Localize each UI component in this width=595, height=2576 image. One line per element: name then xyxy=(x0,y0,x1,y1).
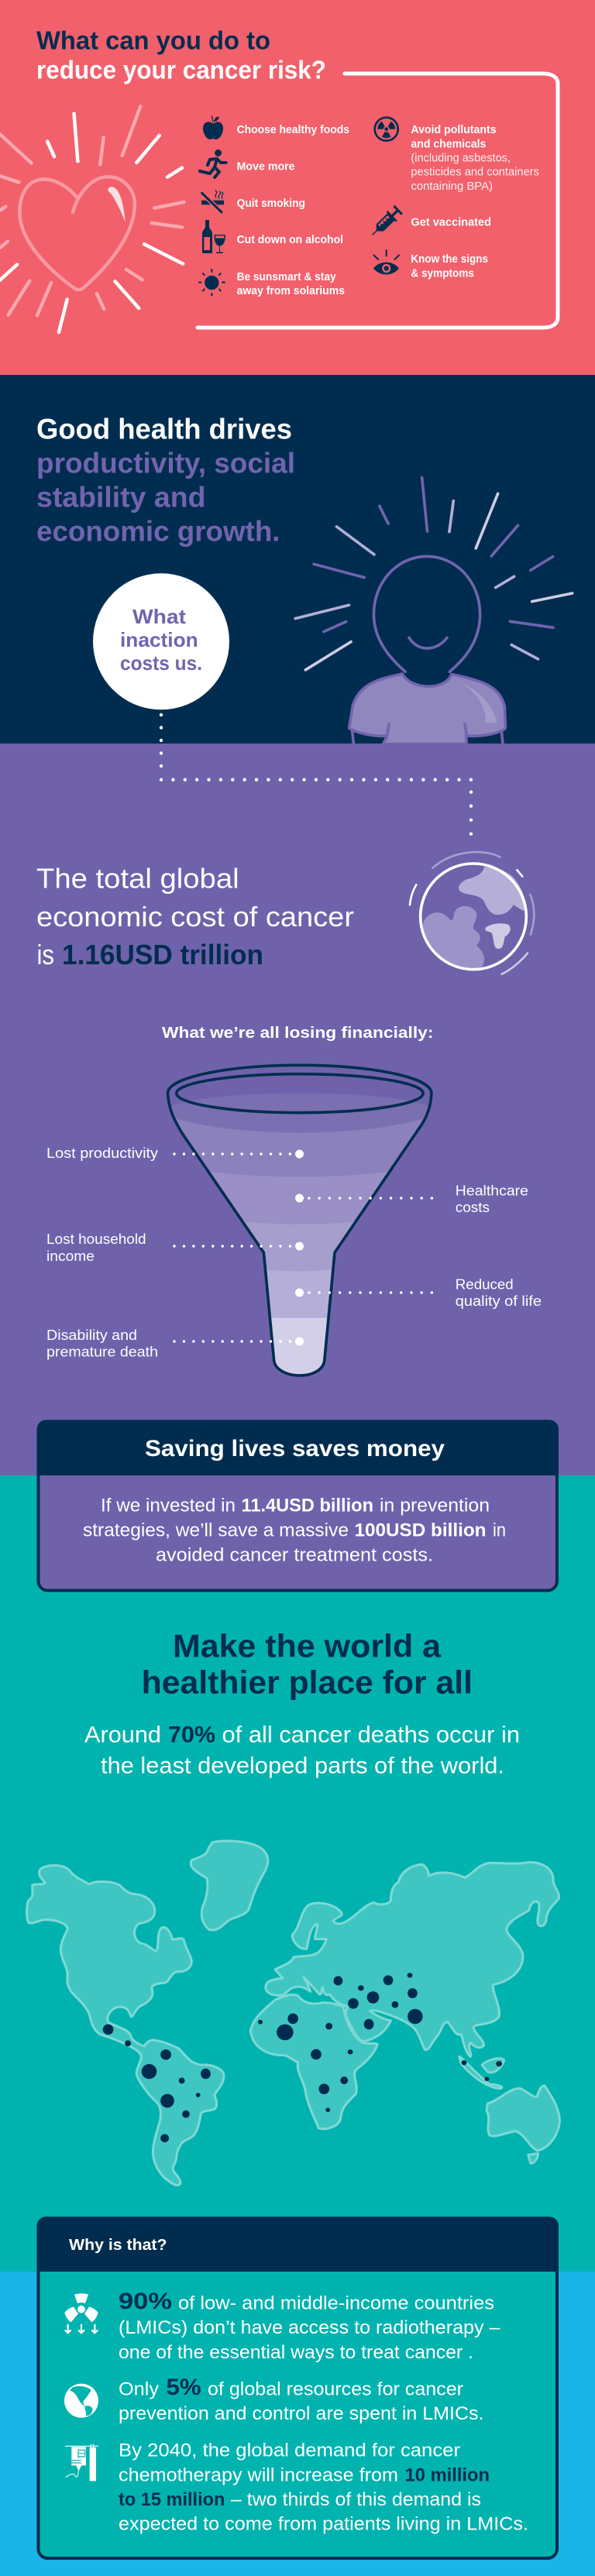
tip: avoid pollutants: and chemicals xyxy=(411,138,486,151)
callout: why is that: Why is that? xyxy=(69,2237,167,2254)
stat: 90 percent: one of the essential ways to treat cancer . xyxy=(119,2342,473,2363)
map: greenland xyxy=(191,1841,268,1930)
label: healthcare costs: costs xyxy=(456,1200,490,1215)
heading: good health drives: productivity, social xyxy=(36,448,295,479)
stat: 5 percent: Only xyxy=(119,2379,159,2399)
heading: good health drives: stability and xyxy=(36,482,206,513)
icon: apple xyxy=(203,116,223,139)
tip: healthy foods: Choose healthy foods xyxy=(237,123,349,136)
text: 70 percent of deaths: Around xyxy=(84,1722,161,1747)
label: healthcare costs: Healthcare xyxy=(456,1183,528,1198)
text: investment savings: 11.4USD billion xyxy=(242,1496,373,1516)
stat: 5 percent: prevention and control are spent in LMICs. xyxy=(119,2403,483,2424)
callout: why is that xyxy=(37,2217,559,2558)
stat: 5 percent: 5% xyxy=(166,2375,201,2400)
label: lost household income: Lost household xyxy=(46,1231,146,1247)
icon: sun xyxy=(199,270,225,296)
heading: total global economic cost: 1.16USD trillion xyxy=(62,939,263,970)
tip: get vaccinated xyxy=(368,204,491,239)
label: disability and premature death: Disability and xyxy=(46,1327,137,1343)
stat: 5 percent: of global resources for cancer xyxy=(208,2379,463,2399)
heading: good health drives: Good health drives xyxy=(36,414,292,445)
tip: avoid pollutants: pesticides and containers xyxy=(411,166,539,179)
label: lost household income xyxy=(46,1231,304,1264)
map: indonesia xyxy=(459,2056,502,2088)
panel: blue footer background xyxy=(0,2272,595,2576)
frame around tips xyxy=(198,74,558,328)
text: 70 percent of deaths: of all cancer deaths occur in xyxy=(222,1722,520,1747)
callout: what inaction costs us: costs us. xyxy=(120,651,202,675)
tip: get vaccinated: Get vaccinated xyxy=(411,216,491,229)
heading: what can you do: What can you do to xyxy=(36,26,270,54)
callout: what inaction costs us: What xyxy=(132,605,186,628)
tip: avoid pollutants: Avoid pollutants xyxy=(411,123,497,136)
text: investment savings: strategies, we’ll save a massive xyxy=(83,1520,349,1540)
panel: good health xyxy=(0,375,595,744)
stat: 90 percent: 90% xyxy=(119,2289,172,2314)
stat: 90 percent: of low- and middle-income countries xyxy=(178,2293,494,2314)
tip: avoid pollutants: (including asbestos, xyxy=(411,151,511,164)
icon: globe xyxy=(410,852,534,974)
callout: saving lives saves money xyxy=(37,1420,559,1591)
tip: quit smoking xyxy=(201,191,305,212)
map: tasmania xyxy=(528,2153,538,2163)
heading: total global economic cost: is xyxy=(37,939,54,970)
text: investment savings: in xyxy=(493,1520,506,1540)
tip: quit smoking: Quit smoking xyxy=(237,197,305,210)
stat: chemotherapy demand xyxy=(65,2440,528,2535)
heading: what can you do: reduce your cancer risk? xyxy=(36,56,326,84)
heading: total global economic cost xyxy=(36,863,354,970)
text: 70 percent of deaths xyxy=(84,1722,520,1778)
tip: sunsmart: Be sunsmart & stay xyxy=(237,270,336,283)
icon: earth xyxy=(64,2384,98,2418)
tip: know the signs xyxy=(373,250,488,280)
stat: chemotherapy demand: chemotherapy will increase from xyxy=(119,2464,398,2485)
heading: make the world: Make the world a xyxy=(173,1627,442,1664)
text: investment savings: If we invested in xyxy=(101,1496,236,1516)
icon: radiotherapy xyxy=(64,2293,98,2333)
icon: chemotherapy xyxy=(65,2444,98,2481)
text: investment savings: 100USD billion xyxy=(355,1520,487,1540)
panel: reduce your cancer risk xyxy=(0,0,595,375)
stat: 5 percent xyxy=(64,2375,483,2424)
stat: chemotherapy demand: 10 million xyxy=(405,2464,490,2485)
icon: bottle and glass xyxy=(202,220,225,253)
text: investment savings: in prevention xyxy=(380,1496,490,1516)
subheading: losing financially: What we’re all losing financially: xyxy=(162,1025,433,1042)
callout: saving lives saves money: Saving lives saves money xyxy=(145,1436,445,1461)
tip: alcohol xyxy=(202,220,343,253)
stat: chemotherapy demand: – two thirds of this demand is xyxy=(231,2489,481,2510)
callout: what inaction costs us: inaction xyxy=(120,628,198,651)
connector: dotted line xyxy=(161,715,471,834)
icon: syringe xyxy=(368,204,404,239)
map: eurasia xyxy=(266,1863,559,2056)
chart: funnel xyxy=(167,1065,432,1379)
stat: 90 percent: (LMICs) don’t have access to radiotherapy – xyxy=(119,2317,500,2338)
heading: total global economic cost: economic cost of cancer xyxy=(36,901,354,933)
icon: heart with rays xyxy=(0,106,184,332)
tip: know the signs: Know the signs xyxy=(411,252,488,266)
stat: chemotherapy demand: to 15 million xyxy=(119,2489,225,2510)
panel: healthier world xyxy=(0,1475,595,2272)
map: americas xyxy=(27,1865,224,2186)
tip: avoid pollutants xyxy=(375,118,539,193)
label: reduced quality of life xyxy=(295,1276,542,1309)
tip: healthy foods xyxy=(203,116,349,139)
heading: what can you do xyxy=(36,26,326,84)
stat: 90 percent xyxy=(64,2289,500,2363)
label: disability and premature death: premature death xyxy=(46,1345,158,1360)
map: australia xyxy=(487,2086,559,2151)
heading: good health drives: economic growth. xyxy=(36,515,280,547)
map: africa xyxy=(250,1994,377,2129)
label: lost productivity xyxy=(46,1145,304,1161)
map: borneo xyxy=(482,2059,504,2073)
label: lost productivity: Lost productivity xyxy=(46,1145,158,1161)
label: lost household income: income xyxy=(46,1249,95,1264)
tip: move more xyxy=(200,149,295,177)
heading: make the world: healthier place for all xyxy=(142,1664,473,1701)
chart: world map xyxy=(27,1841,559,2186)
label: reduced quality of life: Reduced xyxy=(456,1276,514,1292)
text: 70 percent of deaths: 70% xyxy=(168,1722,215,1747)
text: investment savings: avoided cancer treatment costs. xyxy=(156,1545,433,1566)
stat: chemotherapy demand: By 2040, the global demand for cancer xyxy=(119,2440,460,2461)
label: healthcare costs xyxy=(295,1183,528,1215)
tip: alcohol: Cut down on alcohol xyxy=(237,233,343,246)
heading: make the world xyxy=(142,1627,473,1701)
tip: move more: Move more xyxy=(237,160,295,173)
heading: total global economic cost: The total global xyxy=(36,863,239,895)
icon: eye xyxy=(373,250,399,274)
label: disability and premature death xyxy=(46,1327,304,1360)
icon: no smoking xyxy=(201,191,224,212)
text: 70 percent of deaths: the least developed parts of the world. xyxy=(101,1753,504,1778)
label: reduced quality of life: quality of life xyxy=(456,1293,542,1309)
icon: radiation xyxy=(375,118,398,141)
tip: avoid pollutants: containing BPA) xyxy=(411,180,493,193)
panel: economic cost xyxy=(0,744,595,1475)
callout: what inaction costs us xyxy=(93,573,229,709)
tip: sunsmart xyxy=(199,270,345,297)
heading: good health drives xyxy=(36,414,295,547)
icon: runner xyxy=(200,149,226,177)
map dots: cancer deaths xyxy=(103,1973,502,2142)
tip: know the signs: & symptoms xyxy=(411,267,474,280)
illustration: smiling person xyxy=(295,478,573,744)
tip: sunsmart: away from solariums xyxy=(237,284,345,297)
text: investment savings xyxy=(83,1496,506,1566)
stat: chemotherapy demand: expected to come from patients living in LMICs. xyxy=(119,2514,528,2535)
